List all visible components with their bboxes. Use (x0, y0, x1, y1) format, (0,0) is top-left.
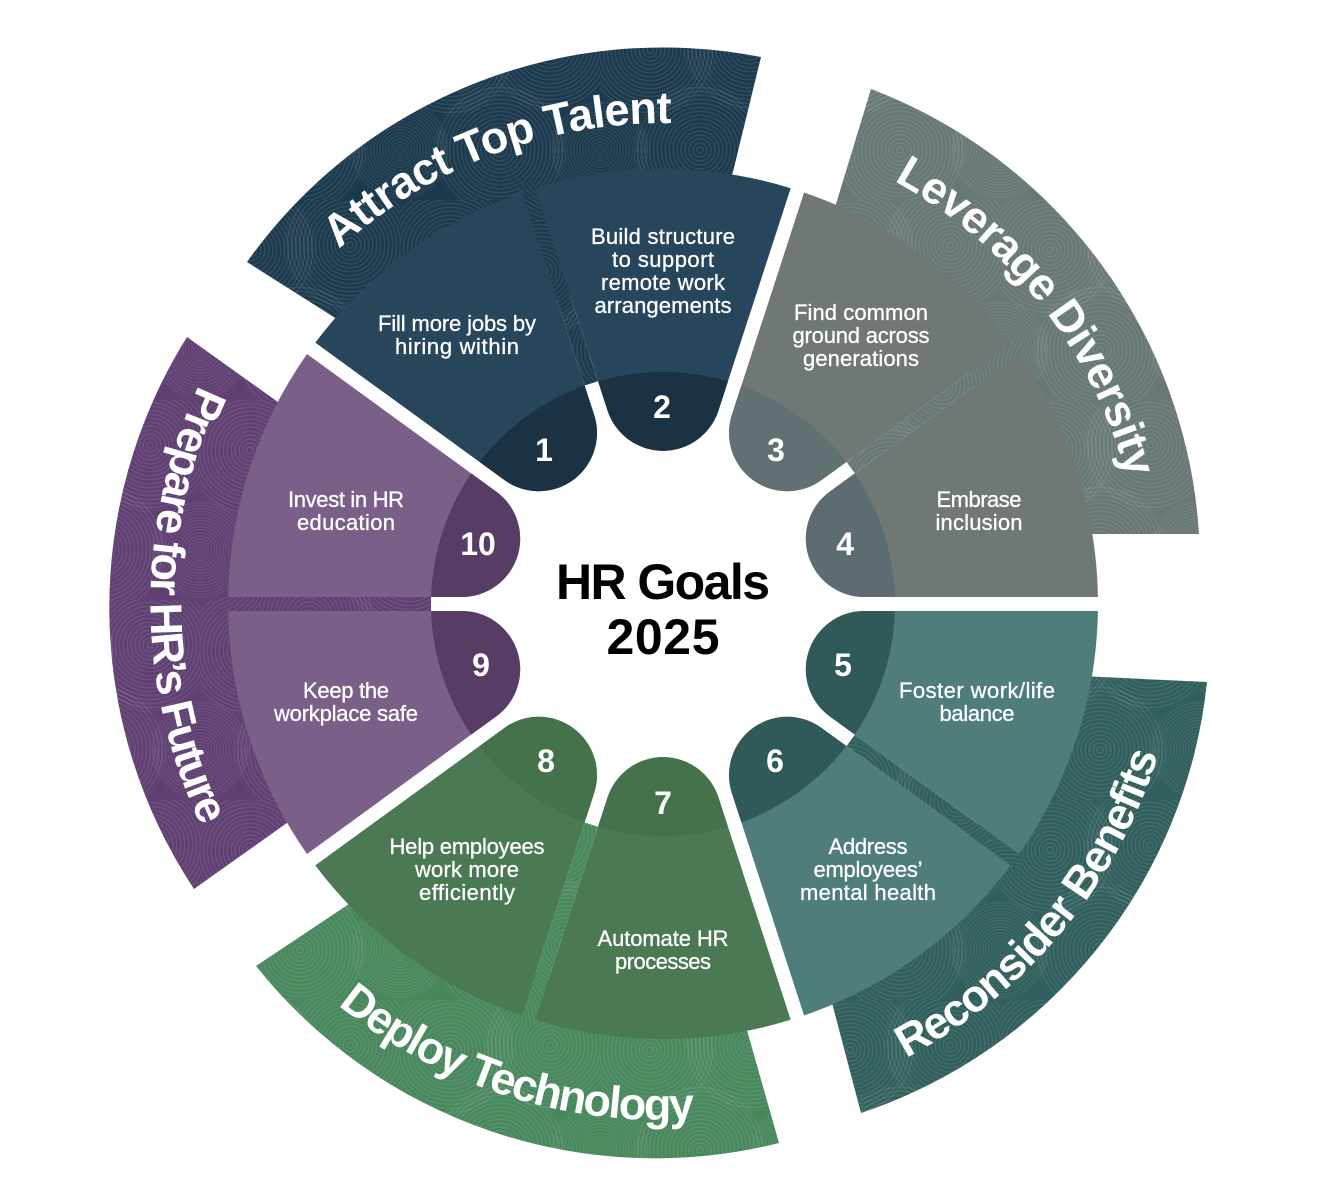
number 1: 1 (535, 432, 553, 468)
text: goal 3: Find common (794, 300, 928, 325)
number 8: 8 (537, 743, 555, 779)
sector: goal 10 (228, 354, 520, 597)
number 3: 3 (767, 432, 785, 468)
text: goal 9 (273, 678, 418, 726)
title (556, 554, 770, 665)
text: goal 9: workplace safe (273, 701, 418, 726)
ring band: Leverage Diversity (822, 89, 1199, 534)
text: goal 4: Embrase (936, 487, 1022, 512)
panel: Leverage Diversity (729, 89, 1199, 597)
text: goal 5: Foster work/life (899, 678, 1055, 703)
text: goal 4 (936, 487, 1022, 535)
ring band: Attract Top Talent (247, 47, 761, 386)
text: goal 8 (390, 834, 544, 905)
text: goal 7: Automate HR (598, 926, 728, 951)
text: goal 2: to support (612, 247, 714, 272)
number 10: 10 (460, 526, 496, 562)
text: goal 10: education (297, 510, 395, 535)
number 5: 5 (834, 647, 852, 683)
text: goal 7: processes (615, 949, 711, 974)
text: goal 4: inclusion (936, 510, 1022, 535)
text: goal 6 (800, 834, 936, 905)
text: goal 10 (288, 487, 404, 535)
sector: goal 4 (806, 354, 1098, 597)
text: goal 2: arrangements (594, 293, 732, 318)
ring heading: Deploy Technology (340, 982, 694, 1130)
ring heading: Prepare for HR’s Future (150, 388, 226, 822)
ring band: Prepare for HR's Future (109, 337, 431, 889)
title: HR Goals (556, 554, 770, 610)
sector: goal 7 (535, 757, 791, 1039)
text: goal 10: Invest in HR (288, 487, 404, 512)
ring heading: Leverage Diversity (896, 156, 1150, 472)
text: goal 3 (792, 300, 930, 371)
text: goal 6: employees’ (814, 857, 922, 882)
number 7: 7 (654, 785, 672, 821)
number 2: 2 (653, 389, 671, 425)
sector: goal 2 (535, 169, 791, 451)
text: goal 3: ground across (792, 323, 930, 348)
text: goal 1: Fill more jobs by (378, 311, 536, 336)
text: goal 8: Help employees (390, 834, 544, 859)
text: goal 9: Keep the (303, 678, 389, 703)
text: goal 8: work more (414, 857, 519, 882)
text: goal 2: remote work (601, 270, 726, 295)
text: goal 6: Address (828, 834, 908, 859)
panel: Deploy Technology (256, 716, 791, 1158)
sector: goal 3 (729, 192, 1010, 492)
panel: Attract Top Talent (247, 48, 791, 492)
number 6: 6 (766, 743, 784, 779)
sector: goal 5 (806, 611, 1098, 854)
ring band: Reconsider Benefits (822, 675, 1207, 1113)
text: goal 3: generations (803, 346, 919, 371)
number 4: 4 (836, 526, 854, 562)
sector: goal 6 (729, 716, 1010, 1016)
text: goal 6: mental health (800, 880, 936, 905)
text: goal 1: hiring within (395, 334, 519, 359)
number 9: 9 (472, 647, 490, 683)
text: goal 2 (591, 224, 735, 318)
ring band: Deploy Technology (256, 822, 779, 1158)
panel: Reconsider Benefits (729, 611, 1207, 1113)
ring heading: Reconsider Benefits (894, 750, 1156, 1057)
ring heading: Attract Top Talent (328, 94, 671, 248)
sector: goal 9 (228, 611, 520, 854)
sector: goal 8 (315, 716, 597, 1016)
title: 2025 (606, 609, 720, 665)
panel: Prepare for HR's Future (109, 337, 520, 889)
sector: goal 1 (315, 192, 597, 492)
text: goal 1 (378, 311, 536, 359)
text: goal 5: balance (940, 701, 1014, 726)
text: goal 2: Build structure (591, 224, 735, 249)
text: goal 5 (899, 678, 1055, 726)
text: goal 7 (598, 926, 728, 974)
text: goal 8: efficiently (419, 880, 515, 905)
